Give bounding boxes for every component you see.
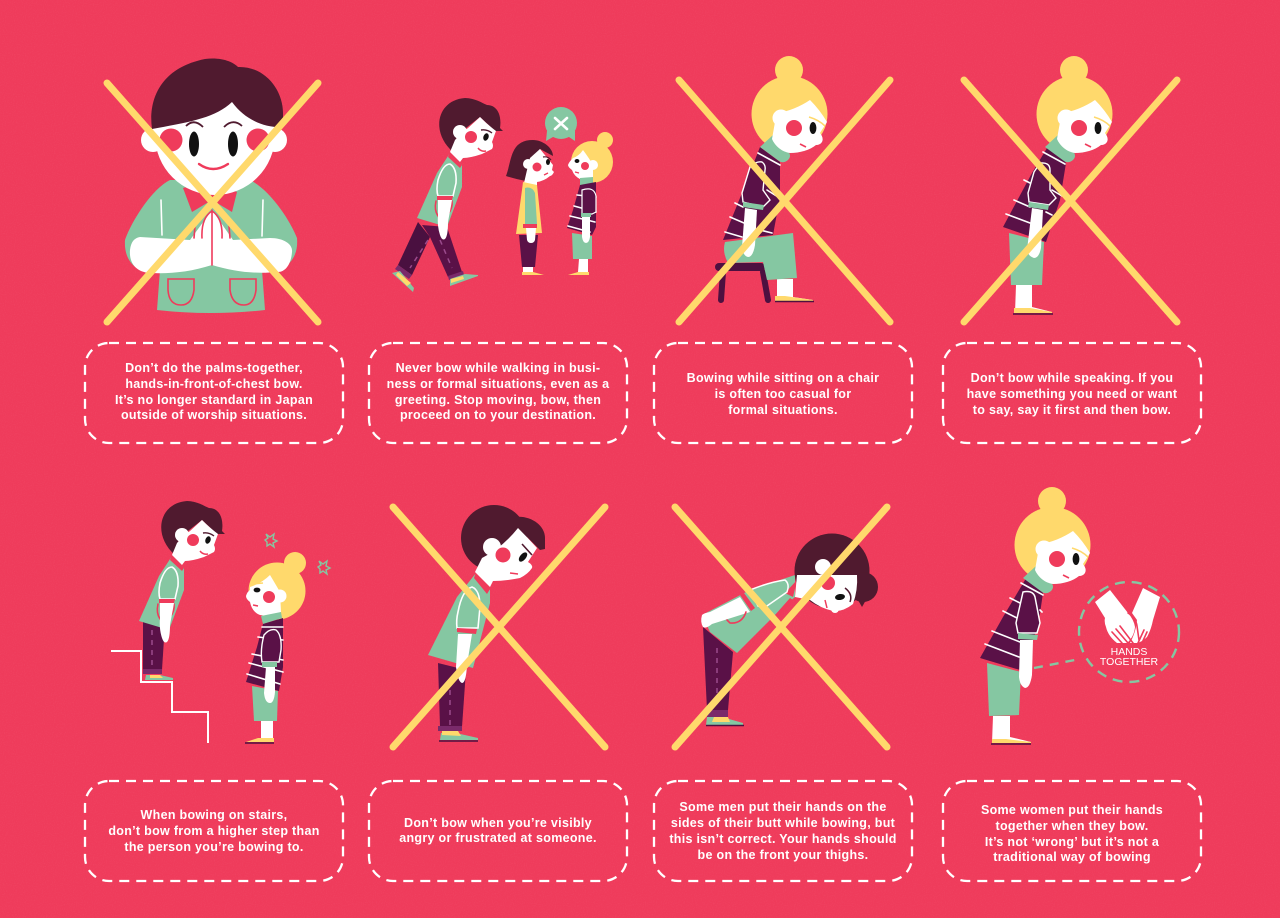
caption: speaking: have something you need or want — [967, 387, 1178, 401]
dashed callout connector — [1034, 659, 1080, 668]
caption: hands on butt: this isn’t correct. Your hands should — [669, 832, 897, 846]
caption: angry — [369, 781, 627, 881]
caption: hands on butt — [654, 781, 912, 881]
caption: walking: ness or formal situations, even as a — [387, 377, 610, 391]
caption: hands together: together when they bow. — [996, 819, 1148, 833]
caption: walking — [369, 343, 627, 443]
body with shirt — [125, 180, 297, 313]
caption: palms together: It’s no longer standard in Japan — [115, 393, 313, 407]
arms and praying hands — [130, 210, 292, 273]
caption: walking: greeting. Stop moving, bow, then — [395, 393, 601, 407]
anger marks — [265, 534, 330, 574]
caption: sitting: formal situations. — [728, 403, 838, 417]
panel: hands together bow — [980, 487, 1179, 744]
caption: hands together: Some women put their hands — [981, 803, 1163, 817]
panel: angry bow — [393, 505, 605, 747]
bowing woman — [1003, 56, 1112, 314]
cross — [964, 80, 1177, 322]
caption: palms together — [85, 343, 343, 443]
panel: walking bow — [392, 98, 613, 292]
cross — [393, 507, 605, 747]
caption: hands together: traditional way of bowing — [993, 850, 1151, 864]
pockets — [168, 279, 256, 305]
head — [141, 59, 287, 195]
caption: sitting — [654, 343, 912, 443]
stairs — [111, 651, 208, 743]
caption: sitting: is often too casual for — [715, 387, 851, 401]
girl with bun facing left — [567, 132, 613, 275]
caption: angry: Don’t bow when you’re visibly — [404, 816, 592, 830]
bowing woman — [980, 487, 1090, 744]
caption: speaking: to say, say it first and then bow. — [973, 403, 1171, 417]
caption: sitting: Bowing while sitting on a chair — [687, 371, 879, 385]
caption: hands on butt: Some men put their hands on the — [679, 800, 887, 814]
icon: hands together — [1095, 588, 1160, 643]
deep bowing man — [701, 534, 878, 726]
seated woman — [723, 56, 828, 302]
chair — [715, 263, 768, 300]
sleeve lines — [161, 200, 263, 236]
hands together label: HANDS — [1111, 646, 1147, 658]
caption: walking: Never bow while walking in busi- — [396, 361, 600, 375]
panel: hands on butt bow — [675, 507, 887, 747]
caption: walking: proceed on to your destination. — [400, 408, 596, 422]
caption: speaking: Don’t bow while speaking. If you — [971, 371, 1173, 385]
panel: palms together bow — [107, 59, 318, 322]
caption: palms together: hands-in-front-of-chest bow. — [125, 377, 303, 391]
panel: speaking bow — [964, 56, 1177, 322]
collar — [183, 180, 237, 212]
caption: palms together: Don’t do the palms-together, — [125, 361, 303, 375]
caption: stairs — [85, 781, 343, 881]
caption: angry: angry or frustrated at someone. — [399, 831, 597, 845]
caption: hands together: It’s not ‘wrong’ but it’s not a — [985, 835, 1160, 849]
caption: stairs: don’t bow from a higher step than — [108, 824, 320, 838]
caption: hands together — [943, 781, 1201, 881]
caption: stairs: When bowing on stairs, — [141, 808, 287, 822]
girl looking up — [245, 552, 306, 743]
bowing man — [428, 505, 545, 741]
caption: palms together: outside of worship situations. — [121, 408, 307, 422]
small girl with bob — [506, 140, 554, 275]
callout circle — [1079, 582, 1179, 682]
finger lines — [194, 210, 230, 265]
cross — [107, 83, 318, 322]
cross — [675, 507, 887, 747]
bowing man on stairs — [139, 501, 225, 680]
caption: hands on butt: be on the front your thighs. — [698, 848, 868, 862]
caption: stairs: the person you’re bowing to. — [124, 840, 304, 854]
panel: sitting bow — [679, 56, 890, 322]
cross — [679, 80, 890, 322]
panel: bowing on stairs — [111, 501, 330, 743]
hands together label line two: TOGETHER — [1100, 656, 1158, 668]
caption: speaking — [943, 343, 1201, 443]
caption: hands on butt: sides of their butt while bowing, but — [671, 816, 896, 830]
bowing man walking — [392, 98, 503, 292]
speech bubble with x — [545, 107, 577, 141]
